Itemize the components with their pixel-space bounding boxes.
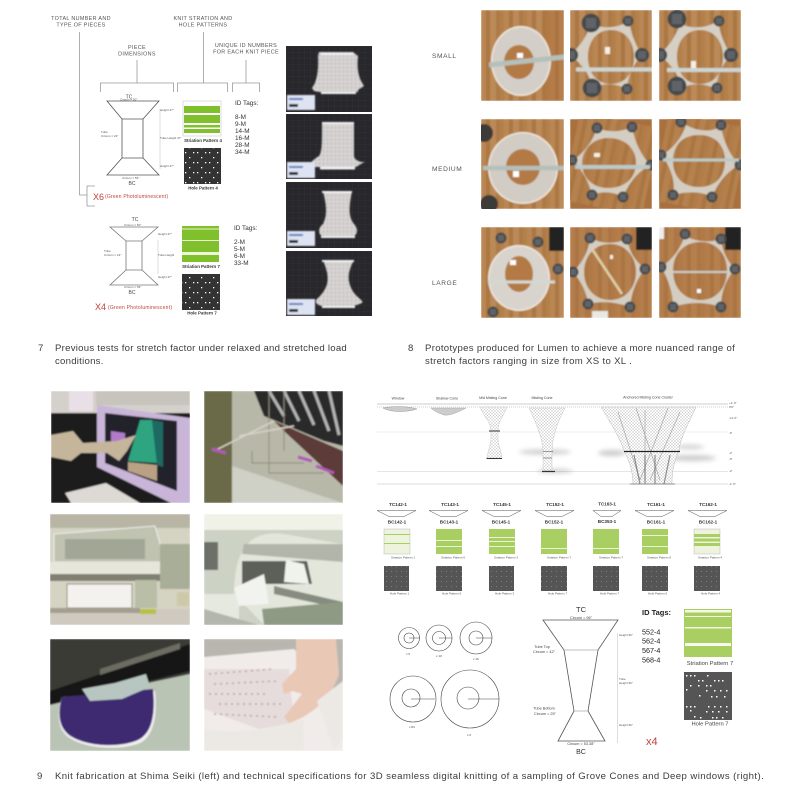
elevation labels: -1' 0" — [729, 482, 736, 486]
detail diagram: large cone dimensions: Circum = 42" — [533, 650, 556, 654]
diagram: piece dimensions set 1: Tube — [101, 130, 108, 134]
label: small: SMALL — [432, 53, 457, 60]
quantity label x6 — [93, 192, 168, 202]
caption 9: 9 — [37, 771, 43, 782]
caption 7 — [38, 343, 347, 367]
photo: knitting machine close-up — [204, 514, 343, 625]
spec column 5: TC163-1 — [598, 502, 616, 506]
detail diagram: large cone dimensions: Circum = 25" — [534, 712, 557, 716]
striation pattern 7 — [182, 226, 220, 269]
heading: total number and type of pieces: TYPE OF PIECES — [56, 22, 106, 28]
id tags list 3: 568-4 — [642, 656, 660, 664]
hole pattern 7 large: Hole Pattern 7 — [691, 722, 729, 728]
photo: large stretched 2 — [659, 227, 741, 318]
photo: designer at knit software monitor — [51, 391, 190, 503]
photo: stretch test 4 — [286, 251, 372, 316]
diagram: piece dimensions set 1: TC — [126, 94, 133, 100]
spec column 4: Striation Pattern 7 — [547, 556, 571, 560]
striation pattern 4: Striation Pattern 4 — [184, 138, 222, 143]
spec column 2 — [429, 502, 468, 596]
spec column 5: BC353-1 — [598, 519, 617, 524]
spec column 1: BC142-1 — [388, 520, 407, 524]
elevation labels: -5' — [729, 431, 733, 435]
spec column 2: TC143-1 — [441, 502, 459, 507]
typology titles: Window — [392, 396, 405, 400]
quantity label x4 large: x4 — [646, 736, 658, 748]
id tags list 2 — [234, 225, 258, 267]
photo: medium stretched 1 — [570, 119, 652, 209]
label: large: LARGE — [432, 280, 457, 287]
diagram: piece dimensions set 1: Circum = 22" — [101, 134, 118, 138]
ring plan diagrams: x 16 — [473, 657, 479, 661]
typology titles: Mid Misting Cone — [479, 396, 507, 400]
id tags list 3: 562-4 — [642, 636, 660, 646]
diagram: piece dimensions set 1: Height 47" — [160, 164, 174, 168]
detail diagram: large cone dimensions: Tube — [619, 677, 626, 681]
detail diagram: large cone dimensions: BC — [576, 749, 586, 756]
id tags list 1: 14-M — [235, 128, 250, 135]
diagram: piece dimensions set 1: Height 47" — [160, 108, 174, 112]
diagram: piece dimensions set 1: BC — [129, 181, 136, 187]
spec column 1: Striation Pattern 1 — [391, 556, 415, 560]
striation pattern 7 large — [684, 609, 733, 667]
detail diagram: large cone dimensions: TC — [576, 605, 587, 614]
caption 7: conditions. — [55, 356, 104, 367]
ring plan diagrams: x 5 — [406, 652, 410, 656]
id tags list 1: 34-M — [235, 149, 250, 156]
photo: stretch test 2 — [286, 114, 372, 179]
elevation labels — [729, 401, 737, 486]
quantity label x4: (Green Photoluminescent) — [108, 305, 172, 311]
quantity label x4: X4 — [95, 302, 106, 312]
photo: small stretched 1 — [570, 10, 652, 101]
detail diagram: large cone dimensions: Height 96" — [619, 681, 633, 685]
diagram: piece dimensions set 2 — [104, 217, 174, 296]
photo: hand holding white knit — [204, 639, 343, 751]
photo: yarn feeders — [204, 391, 343, 503]
spec column 3: BC145-1 — [492, 520, 511, 524]
id tags list 1: 9-M — [235, 121, 246, 128]
detail diagram: large cone dimensions: Height 96" — [619, 633, 633, 637]
caption 8: stretch factors ranging in size from XS to XL . — [425, 356, 632, 367]
spec column 1: TC142-1 — [389, 502, 407, 507]
quantity label x4 — [95, 302, 172, 312]
spec column 3: Striation Pattern 3 — [494, 556, 518, 560]
photo: purple knit sample emerging — [50, 639, 190, 751]
photo: stretch test 3 — [286, 182, 372, 248]
id tags list 2: 5-M — [234, 246, 245, 253]
bracket lines — [80, 32, 260, 206]
spec column 2: BC143-1 — [440, 520, 459, 524]
caption 7: Previous tests for stretch factor under relaxed and stretched load — [55, 343, 347, 354]
spec column 3: TC145-1 — [493, 502, 511, 507]
typology titles — [392, 396, 674, 400]
spec column 6 — [635, 502, 674, 596]
id tags list 1: 28-M — [235, 142, 250, 149]
spec column 1 — [377, 502, 416, 596]
spec column 6: TC161-1 — [647, 502, 665, 507]
striation pattern 4 — [183, 101, 222, 143]
detail diagram: large cone dimensions: Tube Top — [534, 645, 550, 649]
spec column 6: Striation Pattern 6 — [647, 556, 671, 560]
caption 8 — [408, 343, 735, 367]
spec column 5: Hole Pattern 7 — [600, 592, 620, 596]
photo: medium stretched 2 — [659, 119, 741, 209]
diagram: piece dimensions set 1: Circum = 50" — [120, 98, 137, 102]
heading: unique id numbers: UNIQUE ID NUMBERS — [215, 43, 277, 49]
label: medium: MEDIUM — [432, 166, 462, 173]
diagram: piece dimensions set 2: Height 47" — [158, 275, 172, 279]
elevation labels: -2' — [729, 451, 733, 455]
ring plan diagrams — [390, 622, 499, 737]
spec column 7: Striation Pattern 4 — [698, 556, 722, 560]
anchored misting cone cluster — [601, 407, 696, 484]
id tags list 1: 16-M — [235, 135, 250, 142]
spec column 7: Hole Pattern 4 — [701, 592, 721, 596]
spec column 4: BC152-1 — [545, 520, 564, 524]
diagram: piece dimensions set 1: Tube Height 47" — [160, 136, 181, 140]
misting cone — [529, 408, 565, 472]
detail diagram: large cone dimensions: Circum = 53.38" — [567, 742, 595, 746]
diagram: piece dimensions set 2: Circum = 56" — [124, 285, 141, 289]
quantity label x6: (Green Photoluminescent) — [105, 194, 168, 200]
diagram: piece dimensions set 1: Circum = 56" — [122, 176, 139, 180]
hole pattern 7: Hole Pattern 7 — [187, 310, 217, 316]
photo: shima seiki knitting machine — [50, 514, 190, 625]
typology titles: Shallow Cone — [436, 396, 458, 400]
spec column 3 — [482, 502, 521, 596]
shallow cone — [431, 408, 466, 415]
spec column 7 — [688, 502, 727, 596]
diagram: piece dimensions set 2: Tube — [104, 249, 111, 253]
detail diagram: large cone dimensions: Height 96" — [619, 723, 633, 727]
spec column 5 — [593, 502, 623, 596]
id tags list 3: 552-4 — [642, 628, 660, 636]
detail diagram: large cone dimensions: Circum = 96" — [570, 616, 593, 620]
spec column 2: Hole Pattern 6 — [442, 592, 462, 596]
mid misting cone — [480, 407, 507, 458]
typology titles: Misting Cone — [532, 396, 552, 400]
photo: large stretched 1 — [570, 227, 652, 318]
caption 7: 7 — [38, 343, 44, 354]
diagram: piece dimensions set 2: BC — [129, 290, 136, 296]
mist clouds — [519, 445, 716, 473]
hole pattern 7 large — [684, 672, 732, 728]
ring plan diagrams: x 84 — [409, 725, 415, 729]
photo: medium relaxed ring — [481, 119, 564, 209]
caption 8: Prototypes produced for Lumen to achieve a more nuanced range of — [425, 343, 735, 354]
id tags list 2: ID Tags: — [234, 225, 258, 232]
photo: stretch test 1 — [286, 46, 372, 112]
quantity label x6: X6 — [93, 192, 104, 202]
striation pattern 7 large: Striation Pattern 7 — [687, 661, 733, 667]
elevation labels: -5' — [729, 457, 733, 461]
id tags list 3 — [642, 608, 671, 664]
id tags list 1: ID Tags: — [235, 100, 259, 107]
detail diagram: large cone dimensions — [533, 605, 633, 756]
heading: piece dimensions: PIECE — [128, 45, 146, 51]
spec column 6: BC161-1 — [647, 520, 666, 524]
id tags list 2: 6-M — [234, 253, 245, 260]
diagram: piece dimensions set 2: Tube Height — [158, 253, 174, 257]
elevation labels: +1' 0" — [729, 401, 737, 405]
id tags list 3: 567-4 — [642, 646, 660, 655]
elevation labels: -11' 0" — [729, 416, 737, 420]
heading: unique id numbers: FOR EACH KNIT PIECE — [213, 50, 279, 56]
spec column 1: Hole Pattern 1 — [390, 592, 410, 596]
striation pattern 7: Striation Pattern 7 — [182, 264, 220, 269]
section: cone typology elevation — [377, 396, 737, 486]
ring plan diagrams: x 10 — [436, 654, 442, 658]
spec column 4: TC152-1 — [546, 502, 564, 507]
spec column 3: Hole Pattern 3 — [495, 592, 515, 596]
spec column 4 — [535, 502, 574, 596]
id tags list 3: ID Tags: — [642, 608, 671, 617]
hole pattern 4: Hole Pattern 4 — [188, 186, 218, 190]
heading: knit striation and hole patterns: HOLE PATTERNS — [179, 22, 227, 28]
heading: total number and type of pieces: TOTAL NUMBER AND — [51, 16, 111, 22]
spec column 2: Striation Pattern 6 — [441, 556, 465, 560]
caption 9: Knit fabrication at Shima Seiki (left) and technical specifications for 3D seamless digital knitting of a sampling of Grove Cones and Deep windows (right). — [55, 771, 764, 782]
id tags list 1 — [235, 100, 259, 156]
heading: knit striation and hole patterns: KNIT STRATION AND — [173, 16, 233, 22]
ring plan diagrams: x 0 — [467, 733, 471, 737]
caption 8: 8 — [408, 343, 414, 354]
spec column 4: Hole Pattern 7 — [548, 592, 568, 596]
diagram: piece dimensions set 2: Height 47" — [158, 232, 172, 236]
hole pattern 7 — [182, 274, 220, 316]
level lines — [377, 404, 728, 484]
photo: small stretched 2 — [659, 10, 741, 101]
spec column 7: TC162-1 — [699, 502, 717, 507]
window — [383, 407, 417, 412]
spec columns row — [377, 502, 727, 596]
spec column 7: BC162-1 — [699, 520, 718, 524]
diagram: piece dimensions set 2: TC — [132, 217, 139, 223]
elevation labels: 0'0" — [729, 405, 734, 409]
detail diagram: large cone dimensions: Tube Bottom — [533, 706, 555, 710]
typology titles: Anchored Misting Cone Cluster — [623, 396, 674, 400]
diagram: piece dimensions set 2: Circum = 50" — [124, 223, 141, 227]
heading: piece dimensions: DIMENSIONS — [118, 52, 156, 58]
id tags list 1: 8-M — [235, 114, 246, 121]
diagram: piece dimensions set 1 — [101, 94, 181, 187]
id tags list 2: 2-M — [234, 239, 245, 246]
diagram: piece dimensions set 2: Circum = 22" — [104, 253, 121, 257]
spec column 5: Striation Pattern 7 — [599, 556, 623, 560]
photo: small relaxed ring — [481, 10, 564, 101]
id tags list 2: 33-M — [234, 260, 249, 267]
elevation labels: -2' — [729, 469, 733, 473]
hole pattern 4 — [184, 148, 221, 190]
photo: large relaxed ring — [481, 227, 564, 318]
spec column 6: Hole Pattern 6 — [648, 592, 668, 596]
